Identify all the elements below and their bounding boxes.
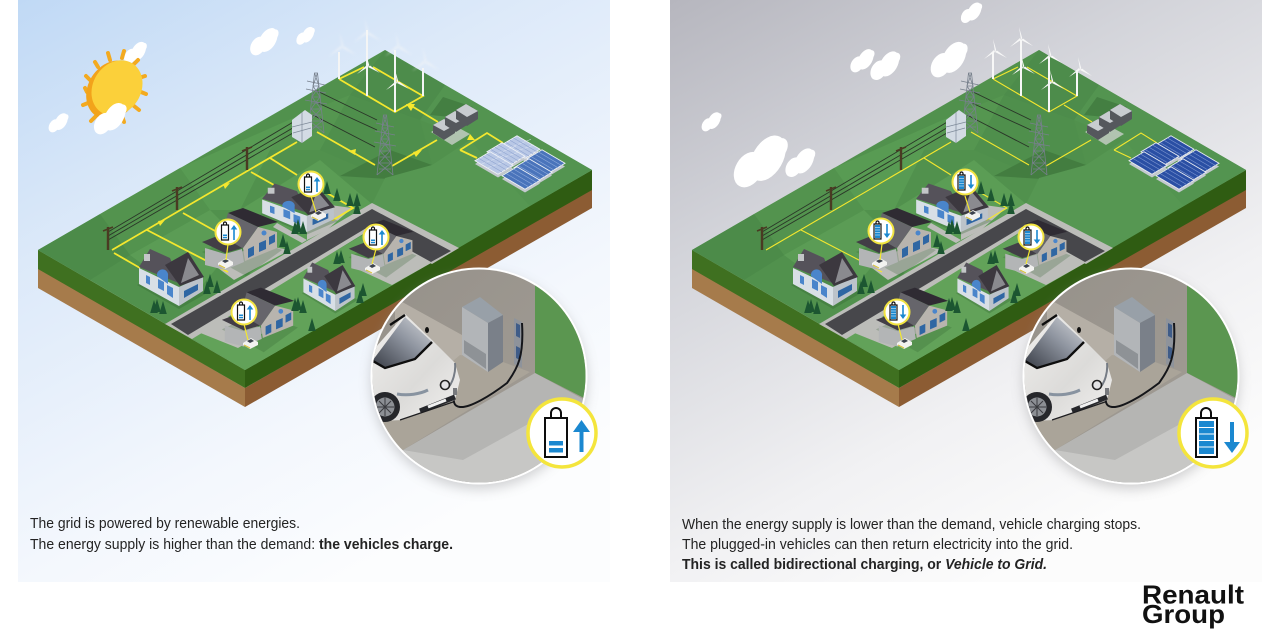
caption: This is called bidirectional charging, or Vehicle to Grid. xyxy=(682,556,1047,573)
logo: Renault Group: Group xyxy=(1142,599,1225,629)
charging inset xyxy=(360,268,600,490)
solar panels xyxy=(1129,136,1219,192)
houses xyxy=(791,181,1071,352)
wind turbines xyxy=(984,27,1092,112)
caption: When the energy supply is lower than the demand, vehicle charging stops. xyxy=(682,516,1141,533)
road and driveways xyxy=(819,203,1113,370)
caption xyxy=(30,515,453,553)
house badges: discharging xyxy=(868,170,1044,340)
solar panels xyxy=(475,136,565,192)
charging inset xyxy=(1012,268,1252,490)
sky background xyxy=(670,0,1262,582)
caption xyxy=(682,516,1141,573)
icon: sun xyxy=(75,50,153,130)
panel: grid charges vehicles xyxy=(18,0,610,582)
pylons and transformer xyxy=(292,73,396,175)
logo: Renault Group: Renault xyxy=(1142,580,1244,610)
wind turbines (motion blurred) xyxy=(329,18,439,112)
clouds xyxy=(699,0,984,193)
caption: The energy supply is higher than the demand: the vehicles charge. xyxy=(30,536,453,553)
yellow direction arrows xyxy=(158,104,475,226)
overhead wires xyxy=(757,90,1031,250)
grass platform xyxy=(38,50,592,407)
badge: battery charging xyxy=(528,399,596,467)
overhead wires xyxy=(103,90,377,250)
panel: vehicles feed the grid xyxy=(670,0,1262,582)
pylons and transformer xyxy=(946,73,1050,175)
grass platform xyxy=(692,50,1246,407)
houses xyxy=(137,181,417,352)
cloud over sun xyxy=(90,99,130,138)
house badges: charging up xyxy=(216,172,388,340)
clouds xyxy=(46,25,317,134)
yellow energy lines xyxy=(112,67,503,272)
caption: The grid is powered by renewable energies. xyxy=(30,515,300,532)
yellow energy lines xyxy=(766,67,1157,272)
logo: Renault Group xyxy=(1142,580,1244,629)
road and driveways xyxy=(165,203,459,370)
badge: battery discharging xyxy=(1179,399,1247,467)
storage units xyxy=(431,104,478,145)
storage units xyxy=(1085,104,1132,145)
caption: The plugged-in vehicles can then return electricity into the grid. xyxy=(682,536,1073,553)
sky background xyxy=(18,0,610,582)
